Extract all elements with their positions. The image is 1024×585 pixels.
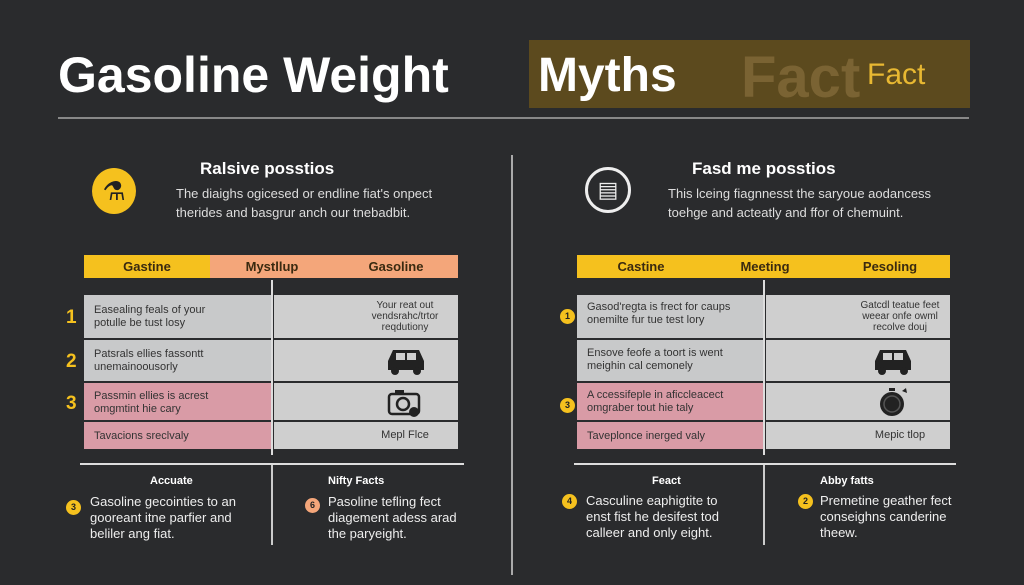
- bottom panel: right: enst fist he desifest tod: [586, 509, 719, 524]
- panel: right intro: [585, 159, 931, 220]
- table: right facts: Ensove feofe a toort is went: [587, 347, 723, 359]
- heading: Fasd me posstios: [692, 159, 836, 178]
- heading: Ralsive posstios: [200, 159, 334, 178]
- icon: document circle: ▤: [598, 177, 618, 202]
- title box: myths fact: Myths: [538, 49, 677, 102]
- table: left myths: Gasoline: [369, 259, 423, 274]
- title box: myths fact: Fact: [741, 45, 860, 110]
- table: right facts: onemilte fur tue test lory: [587, 314, 704, 326]
- table: right facts: Meeting: [740, 259, 790, 274]
- table: left myths: Your reat out vendsrahc/trtor reqdutiony: [372, 300, 438, 333]
- bottom panel: right: theew.: [820, 525, 858, 540]
- table: left myths: 3: [66, 393, 77, 414]
- icon: car: [388, 350, 424, 375]
- table: left myths: 2: [66, 351, 77, 372]
- table: right facts: Gatcdl teatue feet weear onfe owml recolve douj: [861, 300, 939, 333]
- text: This lceing fiagnnesst the saryoue aodancess toehge and acteatly and ffor of chemuint.: [668, 186, 931, 220]
- bottom panel: left: diagement adess arad: [328, 510, 457, 525]
- table: left myths: potulle be tust losy: [94, 317, 185, 329]
- title: Gasoline Weight: [58, 47, 449, 103]
- title box: myths fact: [529, 40, 970, 108]
- table: left myths: Mystllup: [246, 259, 298, 274]
- icon: yellow figures: [92, 168, 136, 214]
- text: The diaighs ogicesed or endline fiat's onpect therides and basgrur anch our tnebadbit.: [176, 186, 432, 220]
- icon: camera: [388, 390, 420, 417]
- bottom panel: left: Nifty Facts: [328, 475, 384, 487]
- icon: document circle: [585, 167, 631, 213]
- bottom panel: right: conseighns canderine: [820, 509, 946, 524]
- bottom panel: left: [66, 463, 464, 545]
- bottom panel: right: Feact: [652, 475, 681, 487]
- icon: stopwatch: [880, 388, 907, 416]
- title box: myths fact: Fact: [867, 58, 925, 91]
- table: right facts: Gasod'regta is frect for caups: [587, 301, 730, 313]
- table: right facts: Mepic tlop: [875, 429, 925, 441]
- table: right facts: Castine: [618, 259, 664, 274]
- table: right facts: Pesoling: [863, 259, 917, 274]
- bottom panel: left: Gasoline gecointies to an: [90, 494, 236, 509]
- bottom panel: right: [562, 463, 956, 545]
- bottom panel: right: 2: [803, 496, 808, 506]
- panel: left intro: [92, 159, 432, 220]
- table: left myths: unemainoousorly: [94, 361, 178, 373]
- table: right facts: [560, 255, 950, 455]
- table: left myths: 1: [66, 307, 77, 328]
- table: left myths: [66, 255, 458, 455]
- table: right facts: A ccessifeple in aficcleacect: [587, 389, 723, 401]
- bottom panel: right: Premetine geather fect: [820, 493, 952, 508]
- bottom panel: right: Casculine eaphigtite to: [586, 493, 718, 508]
- table: left myths: Passmin ellies is acrest: [94, 390, 208, 402]
- bottom panel: left: gooreant itne parfier and: [90, 510, 232, 525]
- table: right facts: meighin cal cemonely: [587, 360, 693, 372]
- icon: yellow figures: ⚗: [102, 176, 126, 206]
- bottom panel: right: Abby fatts: [820, 475, 874, 487]
- table: left myths: Tavacions sreclvaly: [94, 430, 189, 442]
- bottom panel: left: beliler ang fiat.: [90, 526, 175, 541]
- text: 4: [567, 496, 572, 506]
- bottom panel: right: calleer and only eight.: [586, 525, 712, 540]
- table: left myths: Easealing feals of your: [94, 304, 205, 316]
- bottom panel: left: the paryeight.: [328, 526, 407, 541]
- table: right facts: 3: [565, 400, 570, 410]
- bottom panel: left: Pasoline tefling fect: [328, 494, 441, 509]
- bottom panel: left: Accuate: [150, 475, 193, 487]
- table: right facts: 1: [565, 311, 570, 321]
- bottom panel: left: 6: [310, 500, 315, 510]
- table: right facts: omgraber tout hie taly: [587, 402, 693, 414]
- table: left myths: Patsrals ellies fassontt: [94, 348, 203, 360]
- text: 3: [71, 502, 76, 512]
- table: left myths: Mepl Flce: [381, 429, 429, 441]
- table: right facts: Taveplonce inerged valy: [587, 430, 705, 442]
- icon: car: [875, 350, 911, 375]
- table: left myths: Gastine: [123, 259, 171, 274]
- table: left myths: omgmtint hie cary: [94, 403, 181, 415]
